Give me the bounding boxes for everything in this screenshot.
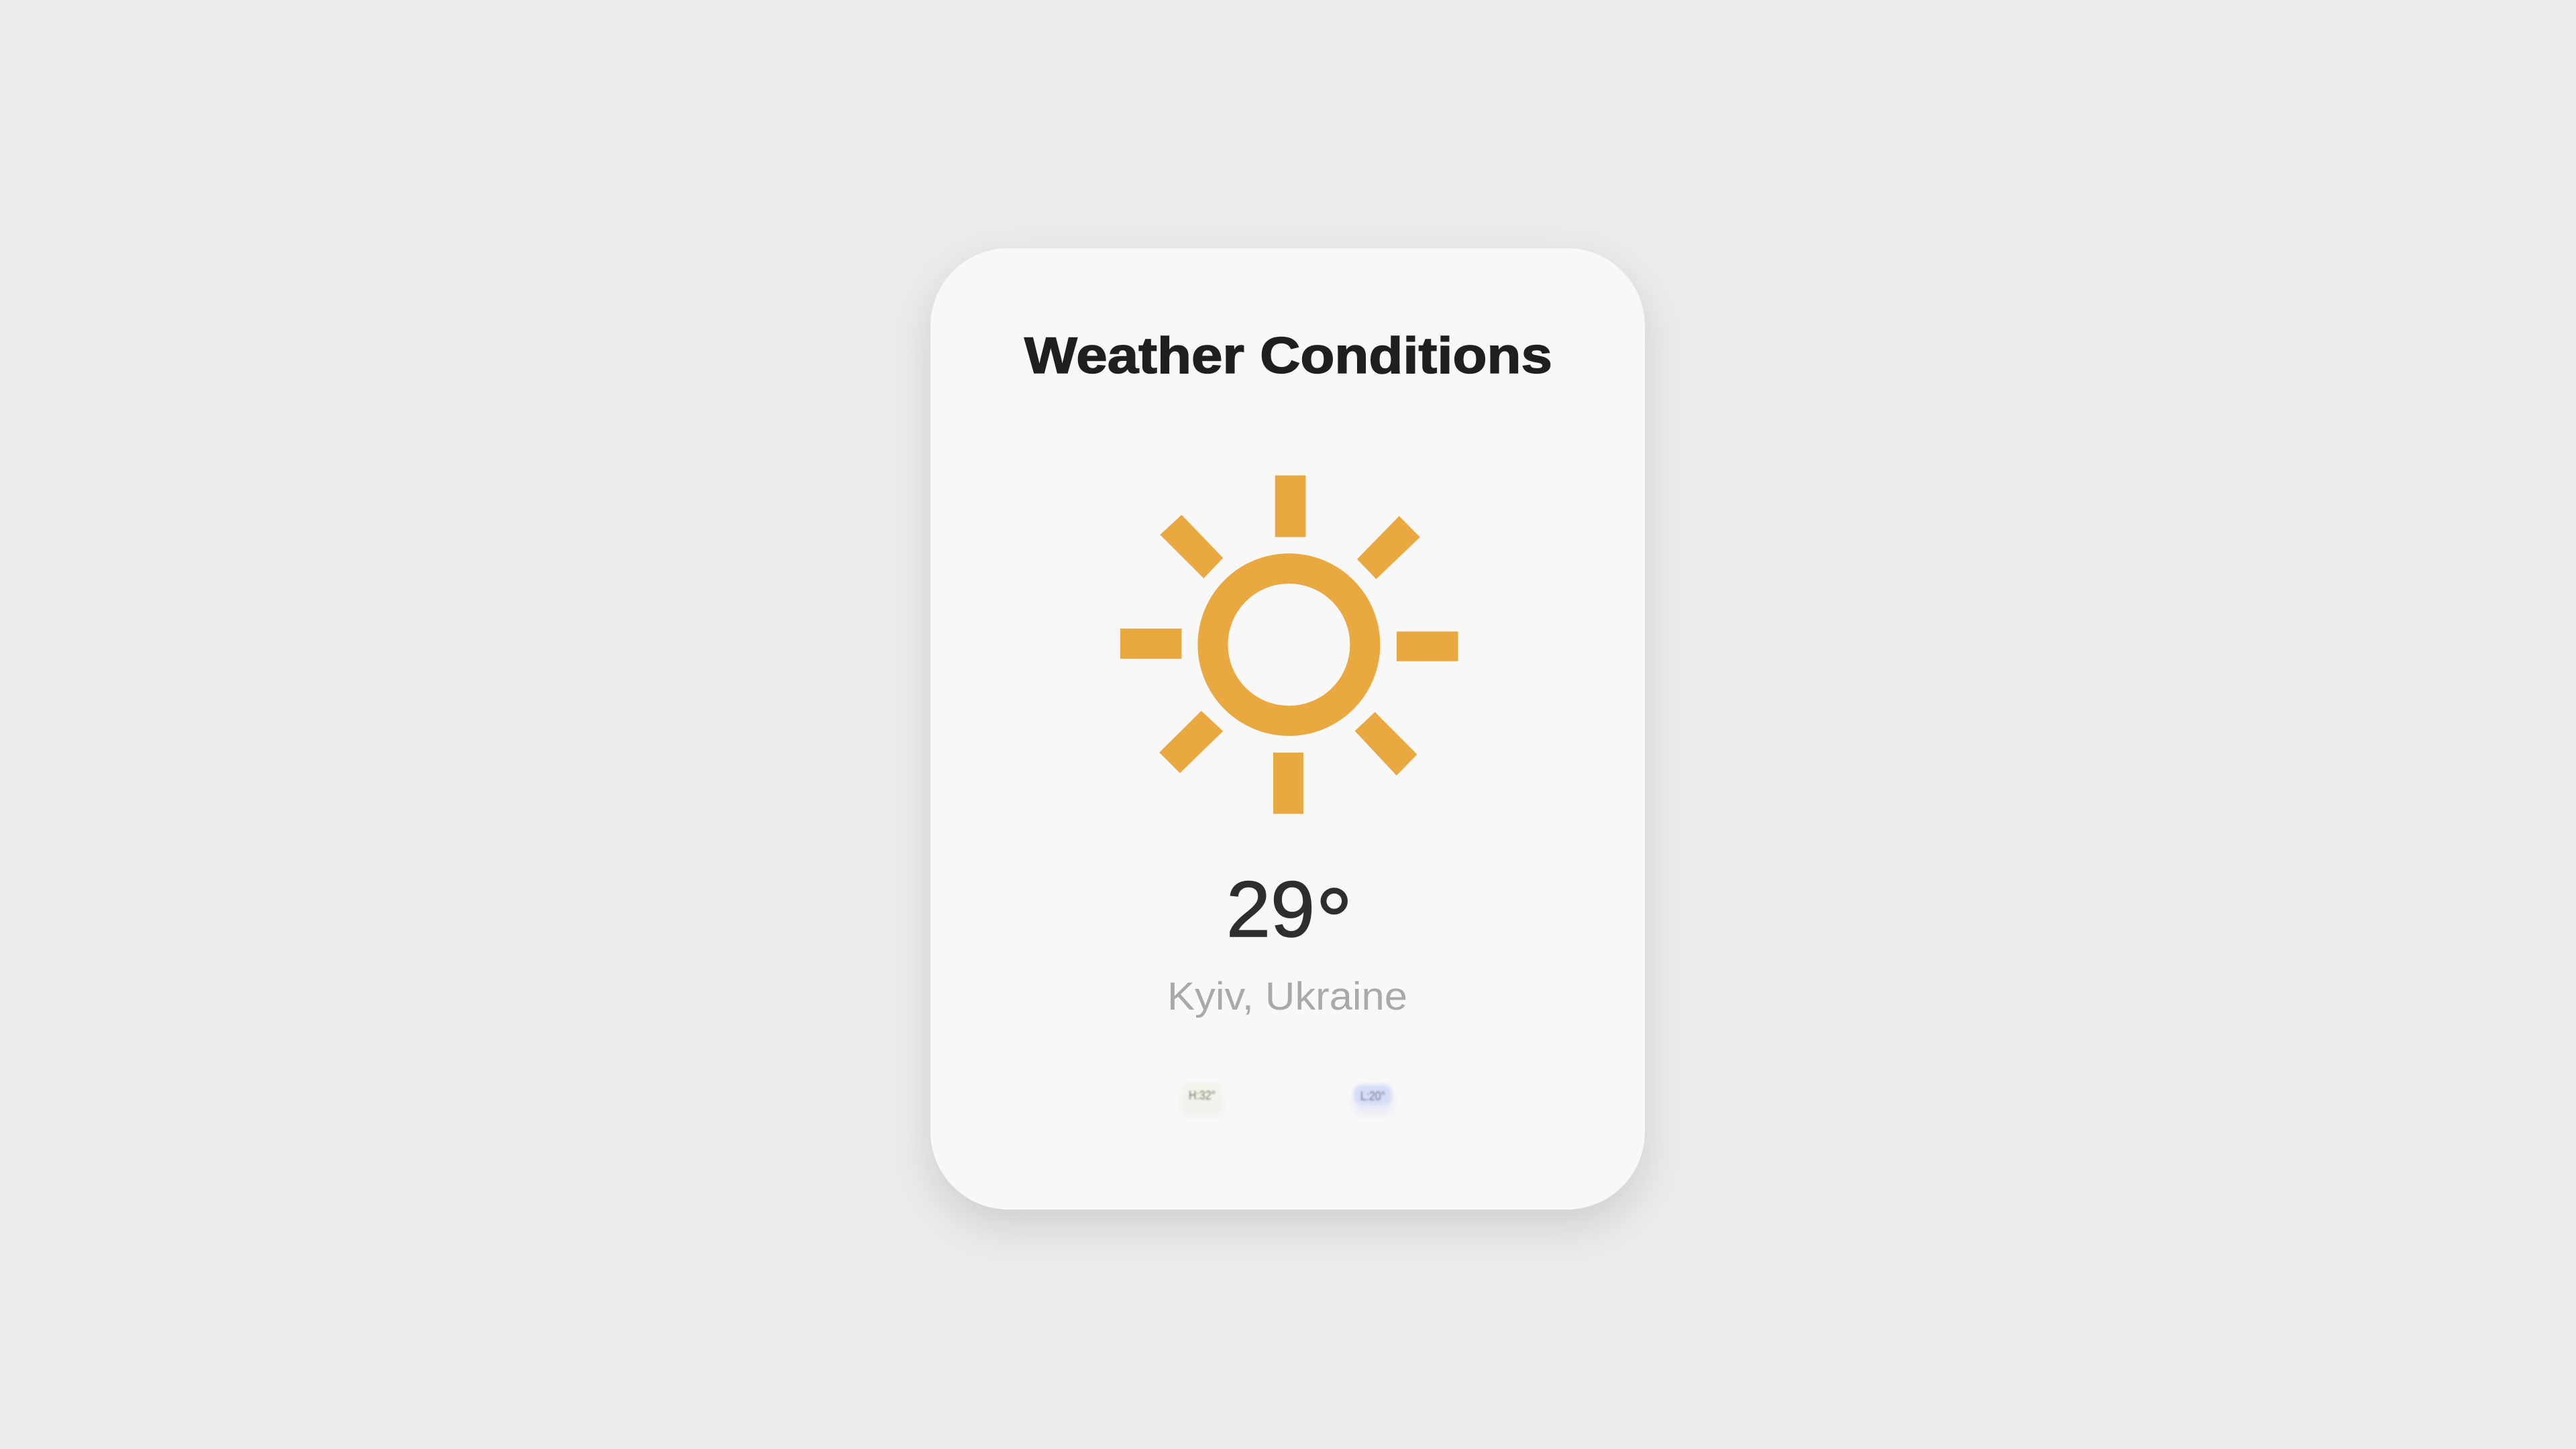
sun ray: bottom left <box>1159 711 1223 773</box>
sun ray: bottom right <box>1355 712 1417 775</box>
low temperature chip <box>1354 1085 1393 1114</box>
sun ray: right <box>1397 631 1458 661</box>
sun ray: bottom <box>1273 753 1303 814</box>
sun ray: top <box>1275 476 1305 537</box>
temperature <box>1226 865 1353 973</box>
panel: weather card <box>930 248 1645 1210</box>
temperature: ° <box>1316 869 1353 973</box>
low temperature chip: L:20° <box>1360 1089 1385 1103</box>
high temperature chip <box>1182 1083 1222 1115</box>
sun ray: top right <box>1357 516 1420 579</box>
sun ray: left <box>1120 629 1181 659</box>
icon: sun <box>1120 476 1458 814</box>
high temperature chip: H:32° <box>1189 1089 1216 1102</box>
title: Weather Conditions <box>1024 327 1552 384</box>
sun ring <box>1213 569 1365 720</box>
location: Kyiv, Ukraine <box>1167 975 1407 1018</box>
sun ray: top left <box>1160 515 1223 578</box>
temperature: 29 <box>1226 865 1315 954</box>
